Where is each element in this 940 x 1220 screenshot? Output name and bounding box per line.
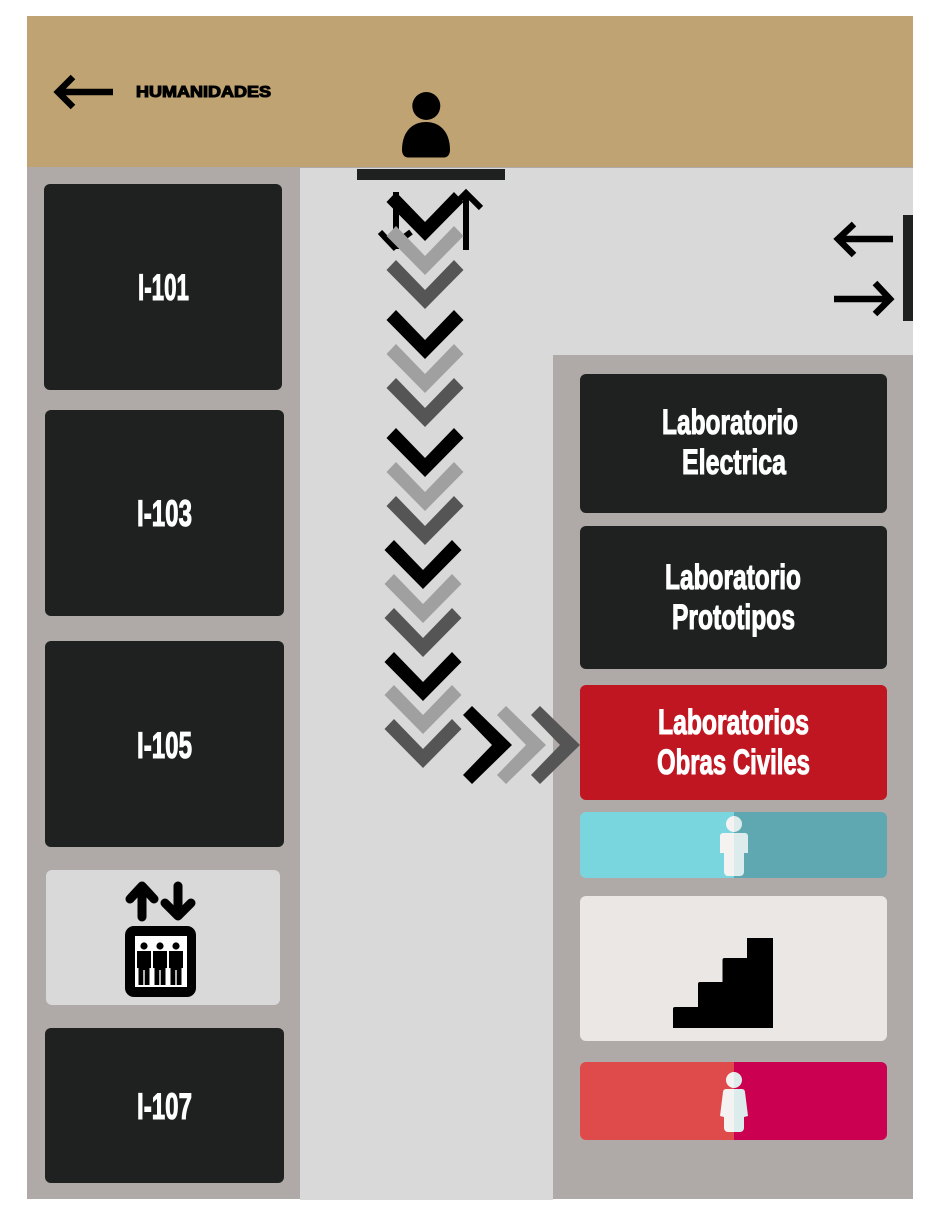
room: Laboratorio Prototipos xyxy=(580,526,887,669)
room: I-103 xyxy=(45,410,284,616)
room: I-103: I-103 xyxy=(137,493,192,534)
icon: exit and entry arrows xyxy=(834,215,913,321)
panel: men's restroom xyxy=(580,812,887,878)
icon: woman xyxy=(720,1072,748,1132)
room: I-101 xyxy=(44,184,282,390)
room: I-105: I-105 xyxy=(137,725,192,766)
icon: elevator cabin xyxy=(125,926,196,997)
icon: left arrow to humanidades xyxy=(58,77,113,107)
room: I-101: I-101 xyxy=(138,267,189,308)
room: Laboratorios Obras Civiles xyxy=(580,685,887,800)
room: I-107: I-107 xyxy=(137,1086,192,1127)
room: Laboratorio Prototipos: Prototipos xyxy=(672,598,795,637)
icon: man xyxy=(720,816,748,876)
heading: humanidades: HUMANIDADES xyxy=(136,84,271,101)
panel: elevator xyxy=(46,870,280,1005)
room: Laboratorios Obras Civiles: Obras Civiles xyxy=(657,743,810,782)
icon: elevator arrows xyxy=(130,886,191,917)
room: Laboratorio Prototipos: Laboratorio xyxy=(665,558,801,597)
icon: stairs xyxy=(673,938,773,1028)
position bar xyxy=(357,169,505,180)
icon: person you are here xyxy=(402,92,450,158)
icon: rightward chevrons xyxy=(463,706,580,784)
icon: thin up and down arrows xyxy=(380,192,481,250)
room: Laboratorios Obras Civiles: Laboratorios xyxy=(658,703,809,742)
panel: stairs xyxy=(580,896,887,1041)
panel: central corridor xyxy=(300,168,913,1200)
panel: women's restroom xyxy=(580,1062,887,1140)
icon: downward chevrons xyxy=(384,192,464,768)
panel: header band xyxy=(27,16,913,167)
room: Laboratorio Electrica: Electrica xyxy=(682,443,786,482)
panel: grey floor background xyxy=(27,167,913,1199)
room: I-105 xyxy=(45,641,284,847)
room: I-107 xyxy=(45,1028,284,1183)
room: Laboratorio Electrica xyxy=(580,374,887,513)
room: Laboratorio Electrica: Laboratorio xyxy=(662,403,798,442)
